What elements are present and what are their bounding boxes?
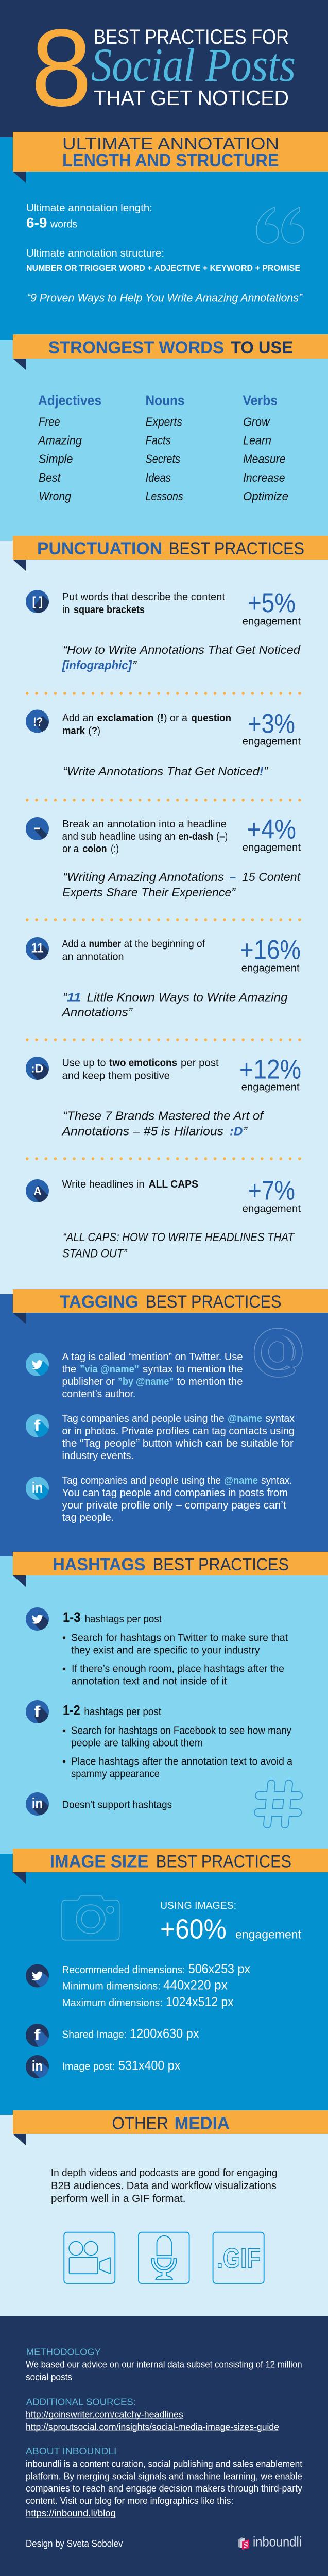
heading ribbon (13, 1552, 328, 1587)
text: about inboundli: platform. By merging social signals and machine learning, we enable (26, 2471, 302, 2481)
icon: facebook: f (34, 1417, 41, 1434)
text: exclamation tip: question (192, 713, 231, 724)
text: emoticons tip: and keep them positive (62, 1070, 170, 1081)
text: twitter tagging: syntax to mention the (143, 1364, 243, 1375)
example: emoticons: Annotations – #5 is Hilarious (61, 1124, 224, 1138)
heading ribbon (13, 1849, 328, 1884)
logo: inboundli (238, 2534, 302, 2550)
heading ribbon (13, 536, 328, 571)
icon: facebook (26, 1700, 49, 1723)
text: facebook dimensions (62, 2027, 199, 2041)
icon: facebook: f (34, 2027, 41, 2044)
stat: using images +60% engagement: +60% (160, 1914, 227, 1945)
text: number tip (62, 938, 205, 962)
text: exclamation tip: ! (160, 713, 164, 724)
text: exclamation tip: exclamation (97, 713, 153, 724)
heading ribbon: IMAGE SIZE (50, 1852, 149, 1871)
example: square brackets: “How to Write Annotations That Get Noticed (63, 643, 301, 656)
text: linkedin dimensions (62, 2059, 181, 2073)
example: square brackets (62, 643, 301, 672)
example: square brackets: ” (132, 658, 137, 672)
text: twitter dimensions: Recommended dimensions: (62, 1964, 185, 1976)
text: other media description: perform well in a GIF format. (51, 2193, 185, 2205)
column: nouns: Nouns (145, 393, 184, 409)
text: en-dash tip: Break an annotation into a headline (62, 819, 227, 830)
example: number: 11 (67, 990, 81, 1004)
stat: +7% engagement (243, 1175, 301, 1215)
example: en-dash: Experts Share Their Experience” (62, 886, 236, 899)
example: square brackets: [infographic] (62, 658, 132, 672)
panel: other media (0, 2110, 328, 2316)
text: square brackets tip: Put words that describe the content (62, 591, 225, 603)
column: verbs: Optimize (243, 489, 288, 503)
icon: GIF format (213, 2232, 264, 2283)
panel: hashtags best practices (0, 1552, 328, 1854)
text: twitter tagging: ”by @name” (118, 1376, 174, 1387)
text: twitter hashtags: Search for hashtags on Twitter to make sure that (71, 1632, 288, 1643)
text: about inboundli: companies to reach and engage decision makers through third-party (26, 2483, 302, 2494)
panel: strongest words (0, 334, 328, 541)
icon: emoticon (26, 1057, 49, 1080)
column: adjectives: Amazing (37, 434, 82, 447)
heading ribbon: HASHTAGS (53, 1555, 146, 1574)
icon: quotation marks (256, 207, 304, 243)
stat: +7% engagement: +7% (248, 1175, 295, 1206)
text: twitter hashtags: they exist and are specific to your industry (71, 1645, 260, 1656)
icon: exclamation and question (26, 710, 49, 733)
text: facebook hashtags: 1-2 (63, 1702, 80, 1718)
icon: linkedin (26, 1477, 49, 1500)
icon: number eleven (26, 937, 49, 960)
text: exclamation tip: ? (92, 725, 97, 737)
icon: en-dash (26, 817, 49, 840)
column: verbs: Grow (243, 415, 270, 429)
column: nouns: Experts (145, 415, 182, 429)
text: twitter dimensions: Maximum dimensions: (62, 1997, 163, 2009)
stat: +12% engagement: engagement (241, 1082, 300, 1093)
text: additional sources (26, 2396, 279, 2432)
text: en-dash tip: – (219, 831, 225, 842)
icon: video camera (64, 2232, 115, 2283)
example: number: Little Known Ways to Write Amazing (87, 990, 288, 1004)
text: square brackets tip: square brackets (74, 604, 145, 616)
text: about inboundli (26, 2446, 302, 2518)
icon: linkedin (26, 1792, 49, 1816)
column: verbs: Increase (243, 471, 285, 484)
text: emoticons tip: Use up to (62, 1057, 106, 1069)
text: exclamation tip: ( (88, 725, 92, 737)
icon: emoticon: :D (31, 1062, 43, 1075)
text: twitter hashtags: hashtags per post (85, 1614, 162, 1625)
icon: microphone (139, 2232, 189, 2283)
icon: letter A: A (34, 1184, 41, 1197)
text: facebook hashtags (63, 1702, 293, 1780)
heading ribbon: BEST PRACTICES (169, 539, 304, 558)
text: other media description: B2B audiences. Data and workflow visualizations (51, 2180, 277, 2192)
heading ribbon (13, 334, 328, 370)
column: verbs: Verbs (243, 393, 278, 409)
example: en-dash (62, 870, 301, 899)
column: verbs: Learn (243, 434, 271, 447)
text: twitter dimensions: 1024x512 px (166, 1995, 234, 2009)
text: twitter tagging: ”via @name” (80, 1364, 139, 1375)
text: facebook tagging: industry events. (62, 1450, 134, 1462)
text: emoticons tip (62, 1057, 219, 1081)
title numeral 8: 8 (31, 7, 92, 129)
example: en-dash: – (230, 870, 236, 884)
column: adjectives: Simple (39, 452, 73, 466)
example: all caps: “ALL CAPS: HOW TO WRITE HEADLINES THAT (63, 1230, 295, 1244)
text: square brackets tip: in (62, 604, 70, 616)
text: exclamation tip: Add an (62, 713, 94, 724)
text: facebook hashtags: Place hashtags after the annotation text to avoid a (71, 1756, 293, 1767)
text: about inboundli: https://inbound.li/blog (26, 2508, 116, 2518)
text: methodology: METHODOLOGY (26, 2347, 101, 2358)
text: en-dash tip: ) (225, 831, 228, 842)
example: exclamation: “Write Annotations That Get Noticed (63, 765, 260, 778)
panel: tagging best practices (0, 1289, 328, 1556)
text: en-dash tip: or a (62, 843, 79, 855)
icon: linkedin: in (32, 1795, 43, 1812)
text: all caps tip: Write headlines in (62, 1179, 144, 1190)
heading ribbon: LENGTH AND STRUCTURE (62, 150, 279, 171)
text: linkedin tagging: your private profile only – company pages can’t (62, 1500, 286, 1511)
title: THAT GET NOTICED (94, 86, 289, 110)
text: exclamation tip: ) or a (164, 713, 188, 724)
text: twitter tagging: publisher or (62, 1376, 115, 1387)
stat: +5% engagement: +5% (248, 588, 296, 618)
text: all caps tip (62, 1179, 198, 1190)
panel: header (0, 0, 328, 137)
column: adjectives (37, 393, 101, 503)
text: twitter dimensions: 440x220 px (163, 1978, 228, 1993)
text: linkedin tagging: syntax. (261, 1475, 292, 1486)
text: linkedin dimensions: Image post: (62, 2061, 115, 2073)
text: facebook tagging (62, 1413, 295, 1462)
example: exclamation: ! (260, 765, 264, 778)
text: annotation structure: Ultimate annotation structure: (26, 248, 164, 259)
column: nouns: Lessons (145, 489, 183, 503)
stat: +3% engagement: engagement (243, 736, 301, 748)
example: en-dash: 15 Content (242, 870, 301, 884)
text: exclamation tip: ) (97, 725, 100, 737)
stat: +16% engagement: +16% (240, 935, 301, 965)
text: additional sources: http://goinswriter.com/catchy-headlines (26, 2409, 183, 2419)
text: facebook tagging: the “Tag people” button which can be suitable for (62, 1438, 294, 1449)
heading ribbon (13, 1289, 328, 1324)
text: other media description: In depth videos and podcasts are good for engaging (51, 2167, 278, 2179)
stat: +5% engagement (243, 588, 301, 628)
text: en-dash tip (62, 819, 228, 855)
title: BEST PRACTICES FOR (94, 26, 289, 48)
stat: using images +60% engagement: engagement (235, 1928, 302, 1941)
text: twitter tagging: A tag is called “mention” on Twitter. Use (62, 1351, 243, 1363)
panel: annotation length and structure (0, 132, 328, 340)
example: emoticons: :D (230, 1124, 243, 1138)
text: facebook hashtags: people are talking about them (71, 1737, 203, 1749)
stat: +4% engagement: engagement (243, 842, 301, 854)
stat: +3% engagement (243, 708, 301, 748)
icon: hash sign (258, 1784, 299, 1824)
text: about inboundli: ABOUT INBOUNDLI (26, 2446, 116, 2456)
text: facebook tagging: @name (228, 1413, 262, 1425)
example: emoticons (61, 1109, 265, 1138)
heading ribbon: BEST PRACTICES (156, 1852, 291, 1871)
text: other media description (51, 2167, 278, 2205)
text: example annotation: “9 Proven Ways to Help You Write Amazing Annotations” (27, 292, 303, 304)
stat: +5% engagement: engagement (243, 616, 301, 628)
text: additional sources: http://sproutsocial.com/insights/social-media-image-sizes-guide (26, 2421, 279, 2432)
title (91, 26, 296, 110)
text: twitter tagging (62, 1351, 243, 1400)
icon: linkedin (26, 2055, 49, 2078)
heading ribbon (13, 132, 328, 183)
text: number tip: an annotation (62, 951, 124, 962)
panel: footer (0, 2316, 328, 2576)
text: annotation length: words (50, 219, 77, 230)
text: twitter dimensions: Minimum dimensions: (62, 1981, 161, 1992)
text: twitter tagging: to mention the (177, 1376, 243, 1387)
icon: facebook (26, 1414, 49, 1437)
text: en-dash tip: ( (216, 831, 219, 842)
heading ribbon: OTHER (112, 2114, 168, 2133)
example: all caps (62, 1230, 295, 1260)
example: number: “ (63, 990, 67, 1004)
text: linkedin tagging: You can tag people and companies in posts from (62, 1487, 288, 1499)
heading ribbon: BEST PRACTICES (153, 1555, 289, 1574)
stat: +16% engagement (240, 935, 301, 974)
text: en-dash tip: colon (82, 843, 107, 855)
icon: twitter (26, 1607, 49, 1631)
text: twitter dimensions: 506x253 px (188, 1962, 250, 1976)
icon: square brackets (26, 590, 49, 613)
text: exclamation tip (62, 713, 231, 737)
column: nouns: Facts (145, 434, 171, 447)
text: facebook tagging: syntax (266, 1413, 295, 1425)
heading ribbon: TO USE (231, 338, 293, 358)
icon: square brackets: [ ] (32, 595, 43, 609)
text: linkedin tagging (62, 1475, 292, 1523)
column: verbs (243, 393, 288, 503)
example: number: Annotations” (61, 1006, 133, 1019)
text: exclamation tip: ( (157, 713, 161, 724)
text: en-dash tip: en-dash (178, 831, 213, 842)
text: design credit: Design by Sveta Sobolev (26, 2538, 123, 2549)
stat: +16% engagement: engagement (241, 963, 300, 974)
text: twitter hashtags: If there’s enough room, place hashtags after the (72, 1663, 284, 1674)
heading ribbon: ULTIMATE ANNOTATION (62, 134, 279, 154)
icon: GIF format: .GIF (217, 2243, 261, 2274)
text: all caps tip: ALL CAPS (149, 1179, 198, 1190)
text: twitter hashtags (63, 1609, 288, 1687)
text: facebook hashtags: Search for hashtags on Facebook to see how many (71, 1725, 291, 1736)
stat: using images +60% engagement (160, 1900, 302, 1945)
text: linkedin tagging: @name (224, 1475, 258, 1486)
icon: exclamation and question: !? (33, 715, 43, 729)
icon: letter A (26, 1179, 49, 1202)
column: nouns: Secrets (145, 452, 180, 466)
text: twitter tagging: content’s author. (62, 1388, 135, 1400)
text: exclamation tip: mark (62, 725, 85, 737)
heading ribbon: TAGGING (60, 1292, 139, 1312)
text: annotation structure (26, 248, 300, 273)
text: number tip: number (89, 938, 121, 950)
text: facebook dimensions: 1200x630 px (130, 2027, 199, 2041)
text: twitter hashtags: 1-3 (63, 1609, 80, 1625)
heading ribbon (13, 2110, 328, 2145)
text: en-dash tip: (:) (111, 843, 119, 855)
text: annotation structure: NUMBER OR TRIGGER WORD + ADJECTIVE + KEYWORD + PROMISE (26, 263, 300, 273)
stat: using images +60% engagement: USING IMAGES: (160, 1900, 236, 1911)
heading ribbon: STRONGEST WORDS (48, 338, 224, 358)
text: linkedin tagging: Tag companies and people using the (62, 1475, 221, 1486)
text: number tip: Add a (62, 938, 87, 950)
text: facebook hashtags: spammy appearance (71, 1768, 160, 1780)
icon: camera (62, 1896, 119, 1940)
icon: number eleven: 11 (31, 941, 44, 955)
text: annotation length: 6-9 (26, 215, 47, 231)
column: nouns: Ideas (145, 471, 171, 484)
example: exclamation: ” (264, 765, 268, 778)
text: linkedin hashtags: Doesn’t support hashtags (62, 1799, 172, 1810)
text: facebook hashtags: hashtags per post (84, 1706, 161, 1718)
example: number (61, 990, 288, 1019)
heading ribbon: MEDIA (175, 2114, 230, 2133)
heading ribbon: BEST PRACTICES (146, 1292, 281, 1312)
text: linkedin dimensions: 531x400 px (118, 2059, 181, 2073)
text: twitter dimensions (62, 1962, 250, 2009)
column: nouns (145, 393, 184, 503)
icon: linkedin: in (32, 1480, 43, 1496)
text: emoticons tip: per post (181, 1057, 219, 1069)
text: about inboundli: inboundli is a content curation, social publishing and sales enablement (26, 2459, 302, 2469)
text: number tip: at the beginning of (124, 938, 205, 950)
column: adjectives: Adjectives (38, 393, 101, 409)
panel: image size best practices (0, 1849, 328, 2115)
text: square brackets tip (62, 591, 225, 616)
text: methodology (26, 2347, 302, 2382)
stat: +7% engagement: engagement (243, 1204, 301, 1215)
example: emoticons: “These 7 Brands Mastered the Art of (63, 1109, 265, 1122)
text: methodology: social posts (26, 2372, 72, 2382)
title: Social Posts (91, 39, 296, 91)
icon: twitter (26, 1353, 49, 1376)
icon: facebook: f (34, 1703, 41, 1720)
text: linkedin tagging: tag people. (62, 1512, 114, 1523)
column: verbs: Measure (243, 452, 286, 466)
example: all caps: STAND OUT” (62, 1247, 128, 1260)
text: en-dash tip: and sub headline using an (62, 831, 175, 842)
icon: linkedin: in (32, 2058, 43, 2075)
icon: at sign (258, 1332, 299, 1374)
stat: +3% engagement: +3% (248, 708, 295, 739)
text: methodology: We based our advice on our internal data subset consisting of 12 million (26, 2360, 302, 2370)
column: adjectives: Wrong (39, 489, 71, 503)
text: facebook dimensions: Shared Image: (62, 2029, 127, 2041)
text: emoticons tip: two emoticons (109, 1057, 177, 1069)
text: annotation length (26, 202, 152, 231)
text: twitter tagging: the (62, 1364, 76, 1375)
heading ribbon: PUNCTUATION (37, 539, 162, 558)
column: adjectives: Free (39, 415, 60, 429)
text: about inboundli: content. Visit our blog for more infographics like this: (26, 2496, 233, 2506)
stat: +12% engagement: +12% (239, 1054, 301, 1084)
panel: punctuation best practices (0, 536, 328, 1294)
stat: +4% engagement: +4% (247, 815, 296, 845)
logo: inboundli: inboundli (253, 2534, 302, 2550)
text: additional sources: ADDITIONAL SOURCES: (26, 2396, 136, 2407)
text: facebook tagging: Tag companies and people using the (62, 1413, 225, 1425)
text: twitter hashtags: annotation text and not inside of it (71, 1675, 227, 1687)
example: emoticons: ” (243, 1124, 248, 1138)
icon: twitter (26, 1964, 49, 1988)
text: annotation length: Ultimate annotation length: (26, 202, 152, 214)
column: adjectives: Best (39, 471, 61, 484)
text: facebook tagging: or in photos. Private profiles can tag contacts using (62, 1426, 295, 1437)
example: en-dash: “Writing Amazing Annotations (63, 870, 225, 884)
icon: facebook (26, 2024, 49, 2047)
